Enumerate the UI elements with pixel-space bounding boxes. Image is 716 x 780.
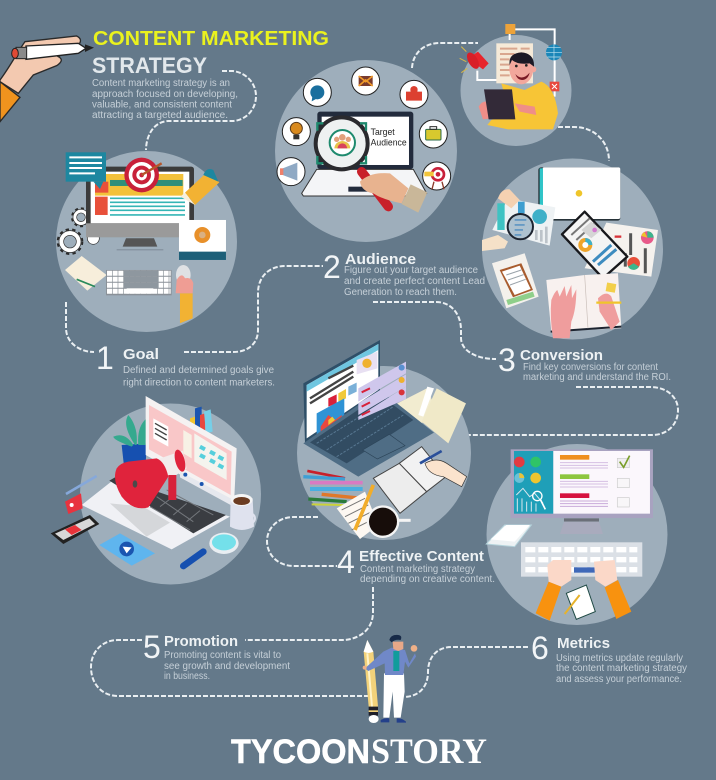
icon: phone [51, 515, 99, 544]
text: promotion description: see growth and development [164, 661, 290, 672]
logo: TYCOON [231, 733, 370, 771]
icon: lined paper and pencil [337, 485, 378, 539]
intro text: attracting a targeted audience. [92, 110, 228, 121]
icon: envelope [352, 67, 380, 95]
subtitle: STRATEGY [92, 53, 207, 78]
icon: magnifier [183, 533, 239, 566]
icon: puzzle [400, 80, 428, 108]
icon: video card [179, 220, 226, 260]
icon: paper stack [486, 525, 531, 547]
icon: tablet [479, 89, 536, 119]
icon: man with pencil [363, 635, 417, 723]
connector: content to promotion [245, 587, 373, 640]
text: goal description: right direction to content marketers. [123, 378, 275, 388]
icon: pen [66, 476, 97, 494]
icon: magnifier with audience [316, 117, 388, 207]
icon: video card [99, 533, 155, 566]
icon: chat [303, 78, 331, 106]
icon: hands and arms [536, 560, 631, 621]
icon: megaphone [115, 449, 187, 508]
icon: hand holding pencil [0, 36, 94, 122]
text: metrics description: Using metrics update regularly [556, 653, 683, 664]
icon: report with magnifier [482, 189, 555, 251]
logo: STORY [371, 731, 487, 771]
intro text: approach focused on developing, [92, 89, 238, 100]
icon: notebook and hands [546, 273, 621, 338]
label: goal heading: Goal [123, 347, 159, 363]
label: audience number: 2 [323, 249, 341, 285]
text: conversion description: Find key conversions for content [523, 362, 658, 373]
icon: hand and cuff [360, 173, 427, 213]
icon: globe [546, 44, 562, 60]
icon: charts paper [585, 223, 658, 277]
icon: monitor [86, 167, 194, 250]
text: metrics description: the content marketing strategy [556, 663, 687, 674]
connector: intro to goal [146, 71, 256, 150]
connector: content circle to number 4 [267, 517, 337, 566]
text: promotion description [164, 650, 290, 682]
connector: goal to audience [184, 266, 323, 352]
text: content description: depending on creative content. [360, 574, 495, 585]
label: goal number: 1 [96, 340, 114, 376]
label: conversion heading: Conversion [520, 348, 603, 364]
connector: audience to conversion [373, 302, 496, 359]
icon: megaphone [277, 158, 305, 186]
icon: document [496, 43, 533, 83]
text: conversion description [523, 362, 671, 383]
icon: coffee cup [230, 494, 255, 530]
icon: target on stand [423, 162, 451, 190]
icon: shirt [487, 82, 558, 129]
icon: laptop screen [146, 396, 237, 505]
panel: metrics illustration [486, 444, 668, 625]
text: audience description [344, 265, 485, 298]
icon: briefcase [419, 120, 447, 148]
icon: monitor [511, 449, 653, 534]
text: audience description: and create perfect content Lead [344, 276, 485, 287]
icon: laptop base [82, 477, 230, 549]
icon: network lines [477, 29, 555, 97]
text: content description: Content marketing strategy [360, 564, 475, 575]
label: promotion heading: Promotion [164, 634, 238, 650]
logo [231, 731, 487, 771]
icon: bulb [282, 118, 310, 146]
icon: check box [505, 24, 515, 34]
intro text: valuable, and consistent content [92, 100, 232, 110]
label: audience heading: Audience [345, 252, 416, 268]
icon: pencil [180, 169, 219, 205]
panel: promotion illustration [51, 396, 261, 584]
panel: person with tablet [460, 24, 572, 146]
icon: gears [58, 208, 99, 254]
icon: phone [562, 212, 627, 278]
label: conversion number: 3 [498, 342, 516, 378]
text: metrics description [556, 653, 687, 685]
icon: like badge [65, 493, 83, 514]
connector: person to conversion [558, 127, 609, 161]
icon: laptop [302, 112, 427, 196]
text: promotion description: Promoting content is vital to [164, 650, 281, 661]
label: target audience [371, 127, 407, 147]
label: content number: 4 [337, 544, 355, 580]
text: audience description: Figure out your target audience [344, 265, 478, 276]
icon: paper and pen [65, 256, 107, 291]
connector: promotion loop [91, 640, 368, 696]
icon: target [124, 158, 162, 192]
label: content heading: Effective Content [359, 549, 484, 565]
connector: goal circle to number 1 [66, 302, 94, 352]
text: goal description [123, 365, 275, 388]
label: metrics heading: Metrics [557, 636, 610, 652]
icon: pencils [303, 471, 363, 505]
icon: coffee cup [367, 505, 411, 538]
icon: close box [550, 82, 559, 91]
icon: laptop [303, 340, 434, 477]
icon: notebook and writing hand [373, 447, 467, 513]
text: goal description: Defined and determined goals give [123, 365, 274, 376]
connector: audience to person [412, 43, 478, 68]
icon: plant [113, 415, 147, 466]
icon: keyboard [521, 542, 642, 577]
text: content description [360, 564, 495, 585]
icon: hand on mouse [176, 265, 193, 323]
panel: conversion illustration [482, 158, 663, 340]
icon: floating cards [358, 362, 406, 420]
icon: white tablet [538, 167, 620, 221]
connector: conversion to content [468, 387, 678, 435]
label: target audience: Target [371, 127, 395, 137]
icon: speech box [66, 152, 106, 189]
icon: papers [397, 387, 466, 443]
icon: chart bars [190, 407, 213, 433]
title: CONTENT MARKETING [93, 28, 329, 50]
text: metrics description: and assess your performance. [556, 674, 682, 685]
label: metrics number: 6 [531, 630, 549, 666]
icon: keyboard [106, 270, 172, 295]
icon: notepad and pencil [565, 585, 595, 619]
panel: effective content illustration [297, 340, 471, 540]
label: promotion number: 5 [143, 629, 161, 665]
intro text: Content marketing strategy is an [92, 78, 230, 89]
text: conversion description: marketing and understand the ROI. [523, 372, 671, 383]
label: target audience: Audience [371, 137, 407, 147]
panel: goal illustration [56, 151, 237, 332]
icon: head [509, 52, 536, 84]
icon: megaphone [460, 47, 489, 73]
connector: person to metrics [405, 647, 528, 697]
text: audience description: Generation to reach them. [344, 287, 457, 298]
intro text [92, 78, 238, 121]
text: promotion description: in business. [164, 671, 210, 682]
panel: audience illustration [275, 60, 457, 242]
icon: clipboard [492, 253, 539, 308]
